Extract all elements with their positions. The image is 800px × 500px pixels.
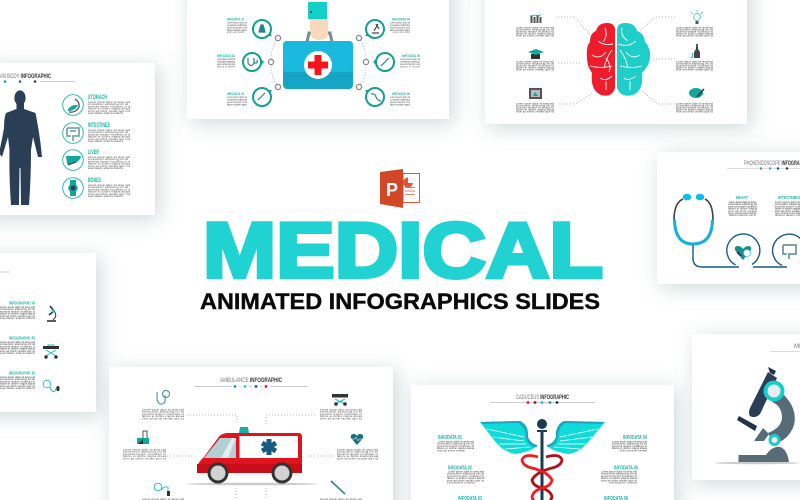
bag panel text blocks: Lorem ipsum dolor sit	[217, 58, 235, 61]
item 35 text: consectetur adipiscing elit do	[0, 343, 36, 346]
brain text blocks: labore et dolore magna aliqua	[516, 108, 555, 112]
bag panel text blocks: Lorem ipsum dolor sit	[227, 96, 247, 99]
panel: human body	[0, 63, 155, 215]
subtitle: ANIMATED INFOGRAPHICS SLIDES	[200, 289, 600, 314]
icon: bottle	[691, 44, 700, 58]
brain text blocks: consectetur adipiscing elit do	[516, 104, 555, 108]
item 34 text: exercitation ullamco laboris	[0, 317, 36, 320]
stethoscope panel text blocks: eiusmod tempor incid	[775, 205, 800, 208]
icon: blood pressure meter	[43, 380, 60, 392]
icon: syringe	[331, 481, 345, 494]
ambulance text blocks: consectetur adipiscing elit do	[123, 451, 167, 454]
bag panel text blocks: Lorem ipsum dolor sit	[400, 58, 420, 61]
item 34 text: consectetur adipiscing elit do	[0, 308, 36, 311]
caduceus text blocks: labore et dolore magna aliqua	[612, 447, 648, 450]
item 36 text: eiusmod tempor incididunt ut	[0, 380, 35, 383]
item 35 text: labore et dolore magna aliqua	[0, 348, 36, 351]
bag panel text blocks: labore et dolore	[217, 66, 236, 68]
ground shadow	[715, 462, 799, 464]
connector nodes	[268, 35, 369, 90]
caduceus text blocks: exercitation ullamco	[609, 482, 638, 484]
brain text blocks: Lorem ipsum dolor sit amet sed	[676, 26, 714, 30]
heading: human body infographic: AN BODY INFOGRAPHIC	[0, 74, 51, 80]
bag panel text blocks: enim ad minim	[227, 31, 244, 34]
stethoscope earpieces and tube	[674, 194, 800, 267]
bag panel text blocks: consectetur adipiscing	[227, 24, 248, 27]
brain text blocks: Lorem ipsum dolor sit amet sed	[516, 102, 555, 106]
stomach text	[88, 101, 131, 115]
bag panel text blocks: labore et dolore magna	[227, 104, 248, 106]
bag panel text blocks: Lorem ipsum dolor sit	[227, 22, 247, 24]
brain text blocks: enim ad minim veniam quis no	[676, 68, 714, 72]
caduceus text blocks: eiusmod tempor incididunt ut	[447, 475, 484, 478]
stethoscope panel text blocks: enim ad minim veniam	[728, 210, 757, 213]
right labels: INFODATA 05	[402, 54, 420, 58]
right labels: INFODATA 04	[392, 18, 410, 22]
bones text: Lorem ipsum dolor sit amet sed	[88, 184, 131, 187]
liver text: consectetur adipiscing elit do	[88, 158, 129, 161]
caduceus text blocks: eiusmod tempor incididunt ut	[437, 445, 474, 448]
ambulance text blocks: eiusmod tempor incididunt ut	[337, 453, 378, 456]
bag panel text blocks: consectetur adipiscing	[400, 60, 421, 64]
stomach text: enim ad minim veniam quis nos	[88, 110, 131, 113]
brain text blocks: Lorem ipsum dolor sit amet sed	[676, 60, 714, 64]
ambulance text blocks: labore et dolore magna aliqua	[123, 455, 167, 458]
stethoscope panel text blocks: consectetur adipiscing	[775, 203, 800, 206]
stomach heading: STOMACH	[88, 95, 107, 101]
right labels	[604, 435, 647, 500]
item 36 text: enim ad minim veniam quis no	[0, 385, 36, 388]
item 36 heading: INFOGRAPHIC 36	[9, 370, 35, 376]
item 34 text: labore et dolore magna aliqua	[0, 313, 36, 316]
heading rule and dots	[4, 80, 75, 83]
eyepiece	[768, 367, 776, 375]
caduceus text blocks: Lorem ipsum dolor sit amet sed	[438, 440, 475, 444]
right labels	[392, 18, 420, 96]
brain text blocks: enim ad minim veniam quis no	[676, 34, 714, 38]
liver text	[88, 156, 131, 170]
brain text blocks: eiusmod tempor incididunt ut	[676, 30, 713, 34]
panel: microscope	[692, 334, 800, 480]
item 34 text: enim ad minim veniam quis no	[0, 315, 36, 318]
ambulance text blocks: labore et dolore magna aliqua	[337, 455, 379, 458]
icon: syringe hand	[137, 431, 149, 444]
icon: graduation cap	[528, 49, 544, 59]
ambulance text blocks: Lorem ipsum dolor sit amet sed	[320, 408, 363, 412]
heart icon	[735, 246, 751, 260]
panel: first aid bag	[187, 0, 449, 119]
left labels: INFODATA 01	[438, 435, 462, 441]
intestines text: enim ad minim veniam quis nos	[88, 138, 131, 141]
caduceus staff	[537, 419, 547, 500]
icon: stomach	[63, 95, 83, 115]
caduceus text blocks: enim ad minim veniam quis no	[447, 479, 485, 482]
large ring	[766, 382, 782, 400]
circle icons	[248, 24, 389, 101]
bones text: labore et dolore magna aliqua	[88, 191, 131, 194]
caduceus text blocks: exercitation ullamco	[447, 482, 476, 484]
ambulance	[197, 427, 302, 484]
bag panel text blocks: labore et dolore magna	[390, 104, 411, 106]
icon: heart pulse	[351, 434, 363, 445]
brain text blocks: enim ad minim veniam quis no	[516, 110, 555, 114]
item 34 heading: INFOGRAPHIC 34	[9, 300, 35, 306]
heading rule and dots	[490, 401, 595, 404]
bag handle	[307, 33, 332, 42]
front window	[204, 438, 236, 458]
brain text blocks: consectetur adipiscing elit do	[676, 104, 714, 108]
item 36 text	[0, 376, 36, 390]
bag panel text blocks: eiusmod tempor ut la	[227, 26, 248, 30]
arm	[768, 393, 795, 444]
item 35 heading: INFOGRAPHIC 35	[9, 336, 35, 340]
ambulance text blocks: eiusmod tempor incididunt ut	[142, 413, 184, 416]
stethoscope panel text blocks: ullamco laboris nisi ut	[729, 214, 756, 217]
icon: stethoscope head	[162, 390, 170, 398]
brain text blocks: Lorem ipsum dolor sit amet sed	[516, 60, 555, 64]
red snake	[522, 456, 552, 500]
liver text: Lorem ipsum dolor sit amet sed	[88, 156, 131, 159]
stethoscope panel text blocks: ullamco laboris nisi	[775, 214, 800, 217]
icon: tablet	[529, 88, 542, 99]
brain text blocks: enim ad minim veniam quis no	[516, 34, 555, 38]
beacon	[239, 427, 249, 433]
panel: brain	[485, 0, 747, 124]
intestines text: exercitation ullamco laboris	[88, 140, 124, 143]
icon: light bulb	[691, 10, 703, 24]
item 35 text: eiusmod tempor incididunt ut	[0, 345, 35, 348]
caduceus text blocks	[437, 440, 648, 484]
icon: palette	[689, 88, 704, 98]
left labels: INFODATA 01	[227, 18, 244, 22]
ambulance text blocks: Lorem ipsum dolor sit amet sed	[142, 408, 185, 412]
ambulance text blocks: eiusmod tempor incididunt ut	[320, 413, 362, 416]
item 34 text	[0, 306, 36, 320]
ambulance text blocks	[123, 408, 379, 500]
heading rule	[770, 350, 800, 352]
liver text: enim ad minim veniam quis nos	[88, 165, 131, 168]
item 34 text: Lorem ipsum dolor sit amet sed	[0, 306, 36, 309]
panel: stethoscope	[657, 152, 800, 284]
stethoscope panel text blocks: labore et dolore magna	[775, 208, 800, 211]
stomach text: consectetur adipiscing elit do	[88, 103, 129, 106]
brain right lobe	[617, 23, 650, 96]
caduceus text blocks: consectetur adipiscing elit do	[447, 473, 485, 476]
item 35 text: enim ad minim veniam quis no	[0, 350, 36, 353]
bones text: eiusmod tempor incididunt ut la	[88, 188, 131, 191]
panel: left infographic	[0, 253, 96, 412]
stethoscope panel text blocks: consectetur adipiscing elit	[728, 203, 757, 206]
brain text blocks: Lorem ipsum dolor sit amet sed	[516, 26, 555, 30]
heading: caduceus infographic: CADUCEUS INFOGRAPHIC	[516, 395, 569, 401]
bag panel text blocks: eiusmod tempor ut la	[227, 101, 248, 104]
heading rule	[0, 271, 10, 273]
bag panel text blocks: labore et dolore	[400, 66, 421, 68]
left wing	[480, 421, 537, 454]
caduceus text blocks: Lorem ipsum dolor sit amet sed	[601, 470, 638, 474]
bag panel text blocks: consectetur adipiscing	[217, 60, 236, 64]
caduceus text blocks: labore et dolore magna aliqua	[447, 477, 485, 480]
microscope	[715, 367, 799, 464]
bag panel text blocks: consectetur adipiscing	[390, 24, 411, 27]
brain text blocks: labore et dolore magna aliqua	[516, 66, 555, 70]
brain text blocks: eiusmod tempor incididunt ut	[516, 30, 554, 34]
right wing	[547, 421, 605, 454]
brain text blocks: eiusmod tempor incididunt ut	[516, 64, 554, 68]
stethoscope panel text blocks: eiusmod tempor incididunt	[728, 205, 757, 208]
stethoscope panel text blocks: Lorem ipsum dolor sit amet	[729, 201, 756, 204]
heading rule and dots	[194, 385, 308, 388]
stethoscope panel text blocks	[728, 201, 800, 217]
item 36 text: Lorem ipsum dolor sit amet sed	[0, 376, 36, 379]
powerpoint logo: P	[386, 180, 398, 200]
item 34 text: eiusmod tempor incididunt ut	[0, 310, 35, 313]
brain text blocks: consectetur adipiscing elit do	[516, 62, 555, 66]
intestines text	[88, 129, 131, 143]
left labels	[438, 435, 482, 500]
caduceus text blocks: eiusmod tempor incididunt ut	[601, 475, 637, 478]
brain text blocks: eiusmod tempor incididunt ut	[676, 64, 713, 68]
stethoscope panel text blocks: Lorem ipsum dolor sit	[775, 201, 800, 204]
bag panel text blocks: Lorem ipsum dolor sit	[390, 22, 410, 24]
bag panel text blocks: eiusmod tempor ut la	[390, 26, 411, 30]
brain text blocks: consectetur adipiscing elit do	[676, 28, 714, 32]
item 36 text: exercitation ullamco laboris	[0, 387, 36, 390]
brain left lobe	[587, 23, 615, 96]
caduceus text blocks: consectetur adipiscing elit do	[437, 443, 475, 446]
rear window	[240, 436, 298, 458]
brain veins	[590, 28, 642, 90]
right labels: INFODATA 05	[614, 466, 638, 472]
brain text blocks: consectetur adipiscing elit do	[516, 28, 555, 32]
brain text blocks: Lorem ipsum dolor sit amet sed	[676, 102, 714, 106]
body tube	[749, 372, 777, 417]
caduceus text blocks: labore et dolore magna aliqua	[437, 447, 475, 450]
caduceus text blocks: eiusmod tempor incididunt ut	[612, 445, 647, 448]
info circles	[243, 20, 394, 106]
ambulance text blocks: enim ad minim veniam quis no	[142, 417, 185, 420]
liver text: eiusmod tempor incididunt ut la	[88, 160, 131, 163]
item 35 text: Lorem ipsum dolor sit amet sed	[0, 341, 36, 344]
icon: bar chart	[530, 14, 542, 23]
caduceus text blocks: labore et dolore magna aliqua	[601, 477, 638, 480]
human silhouette	[0, 90, 42, 205]
panel: ambulance	[109, 367, 393, 500]
liver text: exercitation ullamco laboris	[88, 167, 124, 170]
ambulance text blocks: consectetur adipiscing elit do	[337, 451, 379, 454]
left labels: INFODATA 03	[227, 92, 244, 96]
small ring	[770, 436, 779, 444]
brain text blocks: labore et dolore magna aliqua	[676, 66, 714, 70]
item 35 text: exercitation ullamco laboris	[0, 352, 36, 355]
title: medical: MEDICAL	[203, 206, 603, 294]
caduceus text blocks: consectetur adipiscing elit do	[612, 443, 648, 446]
intestines icon	[783, 245, 796, 259]
ambulance text blocks: labore et dolore magna aliqua	[320, 415, 363, 418]
stethoscope panel text blocks: enim ad minim veniam	[775, 210, 800, 213]
bag panel text blocks: Lorem ipsum dolor sit	[390, 96, 410, 99]
item 36 text: consectetur adipiscing elit do	[0, 378, 36, 381]
bones text	[88, 184, 131, 198]
intestines text: Lorem ipsum dolor sit amet sed	[88, 129, 131, 132]
icon: liver	[63, 150, 83, 170]
bag panel text blocks: consectetur adipiscing	[390, 98, 411, 102]
brain text blocks: labore et dolore magna aliqua	[516, 32, 555, 36]
ambulance text blocks: consectetur adipiscing elit do	[320, 411, 363, 414]
dotted connectors	[167, 415, 333, 500]
medical bag	[283, 41, 353, 89]
caduceus text blocks: enim ad minim veniam	[437, 449, 465, 452]
stomach text: Lorem ipsum dolor sit amet sed	[88, 101, 131, 104]
bones heading: BONES	[88, 178, 101, 184]
brain text blocks: enim ad minim veniam quis no	[516, 68, 555, 72]
ambulance text blocks: Lorem ipsum dolor sit amet sed	[337, 448, 379, 452]
bag panel text blocks	[217, 22, 421, 106]
stomach text: exercitation ullamco laboris	[88, 112, 124, 115]
icon: stretcher	[332, 394, 348, 406]
item 36 text: labore et dolore magna aliqua	[0, 383, 36, 386]
caduceus text blocks: consectetur adipiscing elit do	[601, 473, 638, 476]
bag panel text blocks: eiusmod tempor ut la	[390, 101, 411, 104]
bag panel text blocks: labore et dolore magna	[227, 29, 248, 32]
caduceus text blocks: Lorem ipsum dolor sit amet sed	[448, 470, 485, 474]
brain text blocks	[516, 26, 714, 114]
brain text blocks: eiusmod tempor incididunt ut	[516, 106, 554, 110]
bag panel text blocks: eiusmod tempor ut la	[400, 63, 421, 66]
bag panel text blocks: consectetur adipiscing	[227, 98, 248, 102]
ambulance text blocks: Lorem ipsum dolor sit amet sed	[123, 448, 167, 452]
circle pointers	[260, 30, 377, 96]
intestines text: eiusmod tempor incididunt ut la	[88, 133, 131, 136]
stethoscope panel text blocks: quis nostrud exercitation	[728, 212, 758, 215]
intestines text: labore et dolore magna aliqua	[88, 136, 131, 139]
brain text blocks: labore et dolore magna aliqua	[676, 108, 714, 112]
dotted connectors	[558, 17, 675, 104]
left labels: INFODATA 02	[448, 466, 472, 472]
ambulance text blocks: consectetur adipiscing elit do	[142, 411, 185, 414]
right labels: INFODATA 04	[623, 435, 647, 441]
panel: caduceus	[411, 385, 674, 500]
doctor hand and cuff	[308, 2, 328, 40]
ambulance text blocks: enim ad minim veniam quis no	[337, 457, 379, 460]
caduceus text blocks: enim ad minim veniam	[620, 449, 647, 452]
objective	[737, 416, 757, 431]
brain text blocks: enim ad minim veniam quis no	[676, 110, 714, 114]
base	[738, 447, 789, 462]
icon: microscope	[47, 306, 56, 321]
icon: bones	[63, 178, 83, 198]
wheels	[208, 462, 292, 484]
caduceus text blocks: enim ad minim veniam quis no	[601, 479, 638, 482]
heart heading: HEART	[736, 195, 748, 200]
brain text blocks: consectetur adipiscing elit do	[676, 62, 714, 66]
intestines heading: INTESTINES	[88, 123, 110, 129]
bones text: consectetur adipiscing elit do	[88, 186, 129, 189]
stomach text: labore et dolore magna aliqua	[88, 108, 131, 111]
liver heading: LIVER	[88, 150, 99, 156]
dark snake	[532, 456, 562, 500]
stomach text: eiusmod tempor incididunt ut la	[88, 105, 131, 108]
intestines text: consectetur adipiscing elit do	[88, 131, 129, 134]
star of life	[261, 439, 277, 455]
left labels: INFODATA 02	[217, 54, 235, 58]
bones text: exercitation ullamco laboris	[88, 195, 124, 198]
van body	[197, 433, 302, 473]
ambulance text blocks: eiusmod tempor incididunt ut	[123, 453, 166, 456]
stage	[754, 428, 769, 441]
ambulance text blocks: labore et dolore magna aliqua	[142, 415, 185, 418]
ambulance text blocks: enim ad minim veniam quis no	[320, 417, 363, 420]
bag panel text blocks: labore et dolore magna	[390, 29, 411, 32]
bones text: enim ad minim veniam quis nos	[88, 193, 131, 196]
powerpoint logo	[380, 169, 420, 208]
icon: stretcher	[43, 345, 59, 359]
stethoscope panel text blocks: labore et dolore magna	[728, 208, 758, 211]
ground shadow	[187, 483, 317, 485]
icon: blood pressure meter	[154, 483, 170, 496]
item 35 text	[0, 341, 36, 355]
caduceus text blocks: Lorem ipsum dolor sit amet sed	[612, 440, 648, 444]
brain text blocks: labore et dolore magna aliqua	[676, 32, 714, 36]
bag panel text blocks: enim ad minim	[393, 31, 410, 34]
ambulance text blocks: enim ad minim veniam quis no	[123, 457, 167, 460]
icon: intestines	[63, 123, 83, 143]
stethoscope panel text blocks: quis nostrud exercita	[775, 212, 800, 215]
left labels	[217, 18, 244, 96]
icon: stethoscope	[157, 392, 165, 404]
brain text blocks: eiusmod tempor incididunt ut	[676, 106, 713, 110]
dotted arcs	[271, 38, 366, 87]
right labels: INFODATA 06	[392, 92, 410, 96]
liver text: labore et dolore magna aliqua	[88, 163, 131, 166]
heading: ambulance infographic: AMBULANCE INFOGRAPHIC	[220, 378, 283, 384]
bag panel text blocks: eiusmod tempor ut la	[217, 63, 236, 66]
heading rule and dots	[727, 167, 800, 170]
